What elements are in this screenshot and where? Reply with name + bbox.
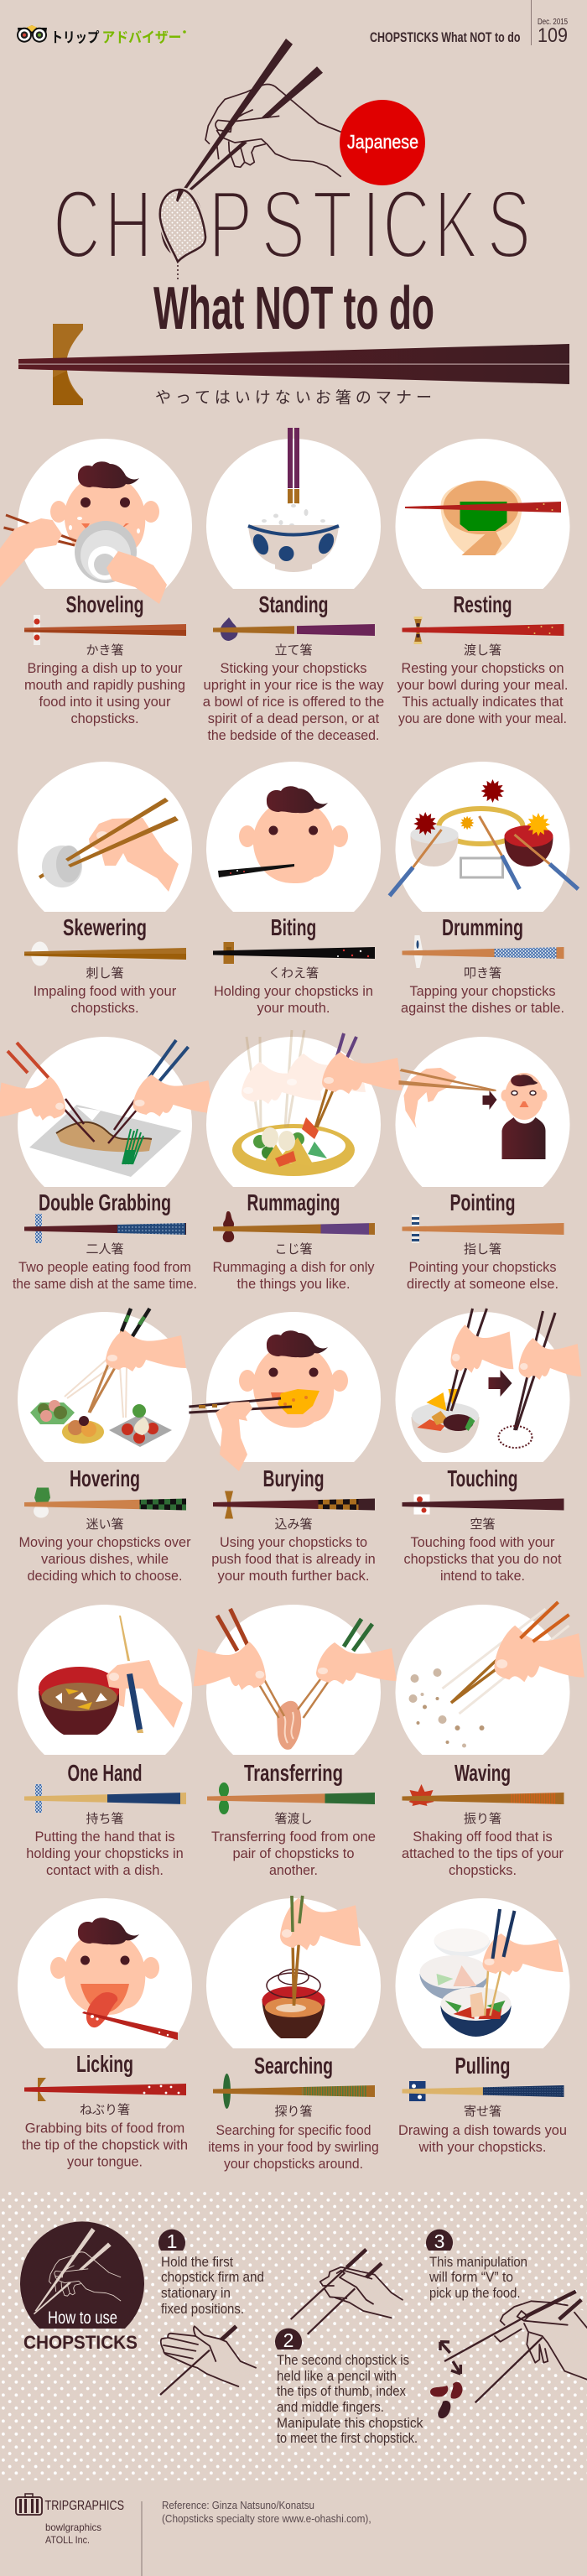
description: Bringing a dish up to your xyxy=(27,660,183,676)
egg background xyxy=(396,1312,570,1462)
egg background xyxy=(396,1037,570,1187)
description: Using your chopsticks to xyxy=(220,1534,367,1550)
panel: how to use chopsticks xyxy=(0,2192,587,2480)
illustration: shoveling food xyxy=(0,461,167,604)
egg background xyxy=(396,1605,570,1755)
chopstick sample xyxy=(213,942,375,964)
description: against the dishes or table. xyxy=(401,1000,564,1016)
chopstick sample xyxy=(403,1495,564,1515)
description: This actually indicates that xyxy=(403,694,564,710)
description xyxy=(407,1259,558,1292)
egg background xyxy=(206,439,381,589)
illustration: chopsticks standing in rice xyxy=(248,428,339,572)
illustration: rummaging through dish xyxy=(232,1030,403,1176)
heading: Shoveling xyxy=(65,591,144,617)
Japanese name: 迷い箸 xyxy=(86,1517,124,1532)
logo text xyxy=(50,30,186,45)
egg background xyxy=(18,439,192,589)
description: Grabbing bits of food from xyxy=(25,2121,184,2136)
chopstick sample xyxy=(403,1215,564,1243)
brand name: TRIPGRAPHICS xyxy=(45,2499,124,2513)
egg background xyxy=(396,762,570,912)
chopstick sample xyxy=(207,1782,375,1814)
Japanese name: くわえ箸 xyxy=(268,965,319,981)
description: directly at someone else. xyxy=(407,1276,558,1292)
description xyxy=(24,660,185,726)
chopstick sample xyxy=(403,935,564,968)
description xyxy=(214,983,373,1016)
illustration: pulling dish with chopsticks xyxy=(419,1909,564,2037)
description: Touching food with your xyxy=(411,1534,555,1550)
rice grain replacing the O xyxy=(160,190,205,279)
description xyxy=(397,660,569,726)
illustration: chopsticks resting on bowl xyxy=(405,481,561,555)
description: Drawing a dish towards you xyxy=(398,2122,567,2138)
footer xyxy=(16,2494,371,2576)
description: Shaking off food that is xyxy=(413,1829,553,1845)
egg background xyxy=(206,1037,381,1187)
illustration: drumming on dishes xyxy=(389,779,579,896)
icon: hand forming V with beans xyxy=(430,2292,587,2418)
card: Hovering xyxy=(18,1309,192,1584)
card: Transferring xyxy=(194,1605,397,1878)
logo text: トリップ xyxy=(50,30,99,45)
card: Pointing xyxy=(396,1037,570,1292)
description: chopsticks. xyxy=(70,710,139,726)
egg background xyxy=(206,762,381,912)
egg background xyxy=(396,1898,570,2048)
egg background xyxy=(206,1312,381,1462)
Japanese name: ねぶり箸 xyxy=(80,2102,130,2117)
description: the tip of the chopstick with xyxy=(22,2137,188,2152)
heading: Waving xyxy=(455,1760,511,1786)
description xyxy=(211,1829,376,1878)
card: Waving xyxy=(396,1602,584,1878)
heading: Standing xyxy=(258,591,329,617)
step 2: and middle fingers. xyxy=(277,2399,384,2415)
description: mouth and rapidly pushing xyxy=(24,677,185,693)
chopstick sample xyxy=(213,1491,376,1518)
description: intend to take. xyxy=(440,1568,525,1584)
chopstick sample xyxy=(24,2078,186,2101)
description: chopsticks that you do not xyxy=(404,1551,562,1567)
illustration: hovering over dishes xyxy=(30,1309,186,1447)
step 1: Hold the first xyxy=(161,2254,233,2270)
description: you are done with your meal. xyxy=(398,710,567,726)
Japanese name: 刺し箸 xyxy=(86,965,124,981)
chopstick sample xyxy=(24,1214,186,1243)
large chopsticks and rest xyxy=(18,324,569,405)
description: Impaling food with your xyxy=(34,983,177,999)
description: your chopsticks around. xyxy=(224,2156,363,2172)
logo text: アドバイザー xyxy=(102,30,181,45)
card: Drumming xyxy=(389,762,579,1016)
reference xyxy=(162,2499,371,2525)
description: with your chopsticks. xyxy=(418,2139,547,2155)
Japanese name: 立て箸 xyxy=(274,643,313,658)
Japanese name: 箸渡し xyxy=(274,1811,313,1826)
Japanese name: こじ箸 xyxy=(274,1241,313,1257)
illustration: pointing at someone xyxy=(399,1068,547,1159)
credits: bowlgraphics xyxy=(45,2521,101,2533)
badge: How to use chopsticks: CHOPSTICKS xyxy=(23,2332,138,2353)
badge: How to use chopsticks: How to use xyxy=(48,2308,117,2328)
description: the same dish at the same time. xyxy=(13,1276,197,1292)
description: Searching for specific food xyxy=(216,2122,371,2138)
illustration: waving food off chopsticks xyxy=(409,1602,584,1748)
card: Pulling xyxy=(396,1898,570,2155)
description: spirit of a dead person, or at xyxy=(208,710,380,726)
card: Burying xyxy=(189,1312,381,1584)
card: Searching xyxy=(206,1896,381,2172)
chopstick sample xyxy=(24,1488,186,1518)
description: Putting the hand that is xyxy=(35,1829,174,1845)
chopstick sample xyxy=(403,617,564,644)
description: Transferring food from one xyxy=(211,1829,376,1845)
chopstick sample xyxy=(24,615,186,645)
illustration: licking chopsticks xyxy=(50,1918,178,2040)
illustration: burying food in mouth xyxy=(189,1330,348,1471)
Japanese name: 渡し箸 xyxy=(464,643,501,658)
heading: Hovering xyxy=(70,1465,140,1491)
step 2 xyxy=(275,2329,423,2446)
description xyxy=(211,1534,376,1584)
Japanese name: 二人箸 xyxy=(86,1241,124,1257)
title: CHOPSTICKS: CHOPSTICKS xyxy=(53,170,531,279)
step 1 xyxy=(158,2230,264,2317)
header title: CHOPSTICKS What NOT to do xyxy=(370,29,520,45)
red circle: Japanese xyxy=(340,100,425,185)
chopstick sample xyxy=(24,941,186,966)
description xyxy=(398,2122,567,2155)
card: Touching xyxy=(396,1309,581,1584)
issue number: 109 xyxy=(538,24,568,47)
description: the bedside of the deceased. xyxy=(208,727,379,743)
description xyxy=(401,983,564,1016)
egg background xyxy=(18,1037,192,1187)
credits xyxy=(45,2521,101,2546)
hero hand with chopsticks xyxy=(176,39,341,202)
logo: TripAdvisor owl xyxy=(17,25,47,43)
step 1: 1 xyxy=(167,2230,177,2252)
badge: How to use chopsticks xyxy=(20,2221,144,2353)
illustration: two people grabbing xyxy=(0,1040,214,1177)
Japanese name: 叩き箸 xyxy=(464,965,501,981)
header xyxy=(17,0,568,47)
Japanese name: 持ち箸 xyxy=(86,1811,124,1826)
chopstick sample xyxy=(403,2081,564,2101)
heading: Biting xyxy=(271,914,316,940)
heading: Resting xyxy=(453,591,512,617)
description: your mouth. xyxy=(257,1000,330,1016)
chopstick sample xyxy=(213,2074,375,2109)
card: Rummaging xyxy=(206,1030,403,1292)
step 3: pick up the food. xyxy=(429,2285,520,2301)
description: chopsticks. xyxy=(70,1000,139,1016)
chopstick sample xyxy=(213,1211,375,1242)
illustration: touching food xyxy=(411,1309,581,1453)
step 3: This manipulation xyxy=(429,2254,527,2270)
description: Holding your chopsticks in xyxy=(214,983,373,999)
illustration: swirling chopsticks in soup xyxy=(262,1896,361,2038)
Japanese name: 振り箸 xyxy=(464,1811,501,1826)
description: contact with a dish. xyxy=(46,1862,164,1878)
description: Moving your chopsticks over xyxy=(18,1534,191,1550)
description xyxy=(22,2121,188,2169)
Japanese name: 指し箸 xyxy=(464,1241,501,1257)
step 2: held like a pencil with xyxy=(277,2368,397,2384)
description xyxy=(26,1829,184,1878)
egg background xyxy=(18,762,192,912)
reference: (Chopsticks specialty store www.e-ohashi.com), xyxy=(162,2512,371,2525)
icon: hand gripping chopsticks xyxy=(291,2250,403,2334)
step 1: stationary in xyxy=(161,2285,231,2301)
egg background xyxy=(206,1605,381,1755)
description: Tapping your chopsticks xyxy=(409,983,555,999)
Japanese name: 探り箸 xyxy=(274,2104,313,2119)
step 3: will form “V” to xyxy=(429,2269,513,2285)
egg background xyxy=(396,439,570,589)
heading: Burying xyxy=(263,1465,324,1491)
card: Standing xyxy=(203,428,384,743)
heading: Licking xyxy=(76,2051,133,2077)
step 1: chopstick firm and xyxy=(161,2269,264,2285)
description: pair of chopsticks to xyxy=(233,1845,354,1861)
card: Resting xyxy=(396,439,570,726)
card: Skewering xyxy=(18,762,192,1016)
icon: open hand with first chopstick xyxy=(160,2326,256,2395)
chopstick sample xyxy=(403,1784,564,1806)
description xyxy=(18,1534,191,1584)
description xyxy=(402,1829,564,1878)
heading: Touching xyxy=(448,1465,518,1491)
description: your tongue. xyxy=(67,2154,143,2169)
chopstick sample xyxy=(213,617,375,641)
step 1: fixed positions. xyxy=(161,2301,244,2317)
logo: TRIPGRAPHICS suitcase xyxy=(16,2494,42,2515)
description: chopsticks. xyxy=(449,1862,517,1878)
step 3 xyxy=(426,2230,527,2301)
Japanese subtitle: やってはいけないお箸のマナー xyxy=(155,388,432,407)
egg background xyxy=(18,1312,192,1462)
heading: Pointing xyxy=(449,1189,515,1215)
description: various dishes, while xyxy=(41,1551,169,1567)
description: Two people eating food from xyxy=(18,1259,191,1275)
egg background xyxy=(18,1898,192,2048)
card: Shoveling xyxy=(0,439,192,726)
description xyxy=(213,1259,375,1292)
description xyxy=(203,660,384,743)
issue date: Dec. 2015 xyxy=(538,18,568,27)
step 2: The second chopstick is xyxy=(277,2352,409,2368)
illustration: skewering food xyxy=(39,798,179,892)
card: Biting xyxy=(206,762,381,1016)
Japanese name: 込み箸 xyxy=(274,1517,313,1532)
description xyxy=(13,1259,197,1292)
step 2: Manipulate this chopstick xyxy=(277,2415,423,2431)
description: Resting your chopsticks on xyxy=(401,660,564,676)
heading: Searching xyxy=(254,2053,333,2079)
heading: Double Grabbing xyxy=(39,1189,171,1215)
chopstick sample xyxy=(24,1784,186,1813)
description: Pointing your chopsticks xyxy=(409,1259,557,1275)
card: Licking xyxy=(18,1898,192,2169)
card: One Hand xyxy=(18,1605,192,1878)
heading: Drumming xyxy=(442,914,523,940)
heading: Rummaging xyxy=(247,1189,340,1215)
Japanese name: かき箸 xyxy=(86,643,124,658)
description xyxy=(34,983,177,1016)
description: holding your chopsticks in xyxy=(26,1845,184,1861)
description xyxy=(208,2122,379,2172)
heading: Pulling xyxy=(455,2053,510,2079)
heading: Transferring xyxy=(244,1760,343,1786)
step 2: 2 xyxy=(283,2329,294,2351)
egg background xyxy=(206,1898,381,2048)
heading: Skewering xyxy=(63,914,147,940)
illustration: biting chopsticks xyxy=(218,786,348,883)
heading: One Hand xyxy=(67,1760,143,1786)
illustration: holding bowl with chopstick hand xyxy=(39,1616,183,1735)
description: push food that is already in xyxy=(211,1551,376,1567)
egg background xyxy=(18,1605,192,1755)
red circle: Japanese: Japanese xyxy=(347,131,418,153)
description: your mouth further back. xyxy=(218,1568,369,1584)
card: Double Grabbing xyxy=(0,1037,214,1292)
step 2: to meet the first chopstick. xyxy=(277,2430,418,2446)
step 3: 3 xyxy=(434,2230,444,2252)
reference: Reference: Ginza Natsuno/Konatsu xyxy=(162,2499,314,2511)
Japanese name: 空箸 xyxy=(470,1517,496,1532)
description: items in your food by swirling xyxy=(208,2139,379,2155)
description: Rummaging a dish for only xyxy=(213,1259,375,1275)
illustration: transferring food between chopsticks xyxy=(194,1609,397,1750)
description: a bowl of rice is offered to the xyxy=(203,694,384,710)
credits: ATOLL Inc. xyxy=(45,2534,90,2546)
description: food into it using your xyxy=(39,694,171,710)
description: attached to the tips of your xyxy=(402,1845,564,1861)
description xyxy=(404,1534,562,1584)
Japanese name: 寄せ箸 xyxy=(464,2104,501,2119)
description: upright in your rice is the way xyxy=(203,677,384,693)
description: another. xyxy=(269,1862,318,1878)
description: the things you like. xyxy=(236,1276,351,1292)
description: your bowl during your meal. xyxy=(397,677,569,693)
description: Sticking your chopsticks xyxy=(220,660,367,676)
step 2: the tips of thumb, index xyxy=(277,2383,406,2399)
description: deciding which to choose. xyxy=(27,1568,183,1584)
